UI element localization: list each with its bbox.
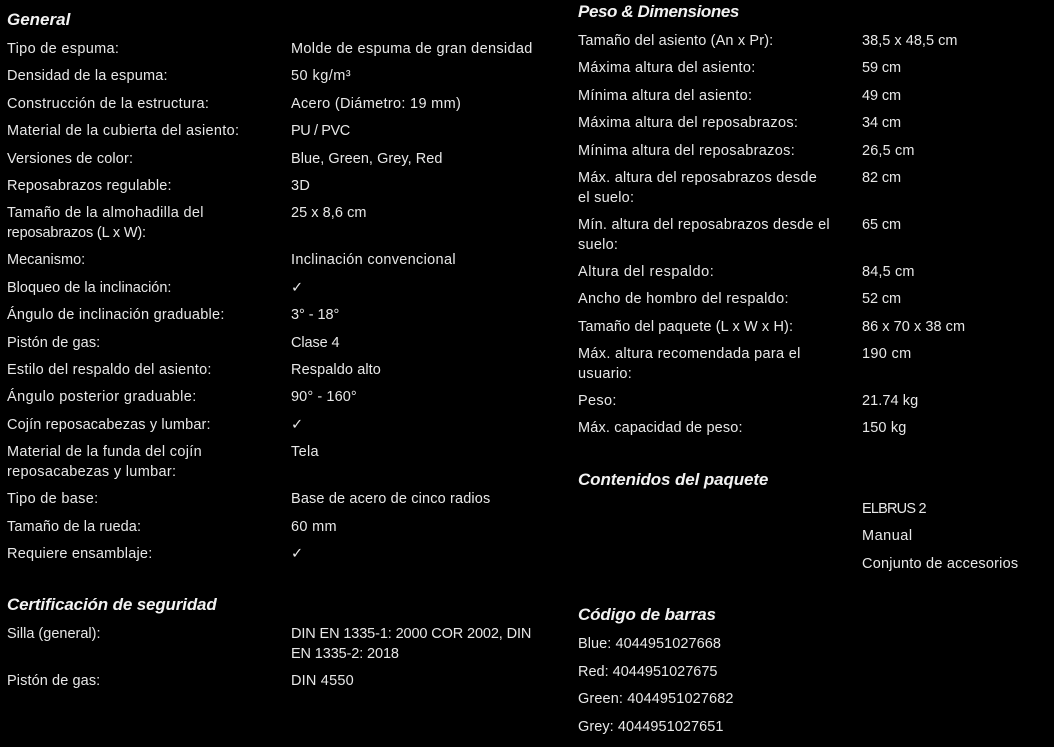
row: foam type: [7, 41, 533, 57]
row: chair certification: Silla (general):: [7, 626, 100, 642]
row: armrest pad size: [7, 205, 366, 241]
barcode: green: Green: 4044951027682: [578, 691, 734, 707]
barcode: red: Red: 4044951027675: [578, 664, 718, 680]
row: headrest and lumbar cushion: ✓: [291, 417, 303, 433]
row: seat cover material: [7, 123, 350, 139]
row: recommended user height: [578, 346, 911, 382]
row: wheel size: [7, 519, 337, 535]
row: tilt angle: 3° - 18°: [291, 307, 339, 323]
row: frame construction: [7, 96, 461, 112]
row: gas piston certification: DIN 4550: [291, 673, 354, 689]
row: gas piston: [7, 335, 340, 351]
row: backrest shoulder width: Ancho de hombro del respaldo:: [578, 291, 789, 307]
row: backrest angle: 90° - 160°: [291, 389, 357, 405]
row: adjustable armrest: Reposabrazos regulable:: [7, 178, 172, 194]
row: gas piston certification: [7, 673, 354, 689]
row: package size: 86 x 70 x 38 cm: [862, 319, 965, 335]
row: mechanism: Mecanismo:: [7, 252, 85, 268]
row: backrest style: [7, 362, 381, 378]
row: backrest style: Respaldo alto: [291, 362, 381, 378]
item: accessories: Conjunto de accesorios: [862, 556, 1018, 572]
row: chair certification: [7, 626, 531, 662]
row: backrest shoulder width: 52 cm: [862, 291, 901, 307]
row: base type: [7, 491, 490, 507]
row: backrest style: Estilo del respaldo del asiento:: [7, 362, 212, 378]
item: manual: Manual: [862, 528, 913, 544]
row: tilt lock: ✓: [291, 280, 303, 296]
row: weight: [578, 393, 918, 409]
row: max armrest height from floor: 82 cm: [862, 170, 901, 186]
row: max armrest height: Máxima altura del reposabrazos:: [578, 115, 798, 131]
row: weight: Peso:: [578, 393, 617, 409]
row: recommended user height: usuario:: [578, 366, 632, 382]
row: tilt angle: [7, 306, 339, 323]
row: seat cover material: PU / PVC: [291, 123, 350, 139]
row: colour versions: Blue, Green, Grey, Red: [291, 151, 443, 167]
heading: General: General: [7, 10, 70, 29]
row: armrest pad size: Tamaño de la almohadilla del: [7, 205, 204, 221]
row: foam type: Tipo de espuma:: [7, 41, 119, 57]
row: assembly required: Requiere ensamblaje:: [7, 546, 152, 562]
row: min seat height: 49 cm: [862, 88, 901, 104]
row: backrest height: Altura del respaldo:: [578, 264, 714, 280]
row: min armrest height from floor: [578, 217, 901, 253]
row: min seat height: Mínima altura del asiento:: [578, 88, 752, 104]
row: gas piston: Clase 4: [291, 335, 339, 351]
row: min armrest height from floor: suelo:: [578, 237, 618, 253]
row: seat size: [578, 33, 958, 49]
row: headrest and lumbar cushion: [7, 417, 303, 433]
row: chair certification: EN 1335-2: 2018: [291, 646, 399, 662]
row: frame construction: Construcción de la estructura:: [7, 96, 209, 112]
row: max armrest height from floor: Máx. altura del reposabrazos desde: [578, 170, 817, 186]
row: max seat height: [578, 60, 901, 76]
row: min armrest height from floor: 65 cm: [862, 217, 901, 233]
row: max armrest height: 34 cm: [862, 115, 901, 131]
row: min armrest height: [578, 143, 915, 159]
row: armrest pad size: reposabrazos (L x W):: [7, 225, 146, 241]
row: seat cover material: Material de la cubierta del asiento:: [7, 123, 239, 139]
row: tilt lock: [7, 280, 303, 296]
row: backrest height: 84,5 cm: [862, 264, 915, 280]
barcode: grey: Grey: 4044951027651: [578, 719, 723, 735]
row: min armrest height: Mínima altura del reposabrazos:: [578, 143, 795, 159]
row: min seat height: [578, 88, 901, 104]
row: frame construction: Acero (Diámetro: 19 mm): [291, 96, 461, 112]
heading: barcode: Código de barras: [578, 605, 716, 624]
row: gas piston certification: Pistón de gas:: [7, 673, 100, 689]
row: foam density: 50 kg/m³: [291, 68, 351, 84]
row: cushion cover material: reposacabezas y lumbar:: [7, 464, 176, 480]
row: mechanism: Inclinación convencional: [291, 252, 456, 268]
row: min armrest height from floor: Mín. altura del reposabrazos desde el: [578, 217, 830, 233]
row: max seat height: 59 cm: [862, 60, 901, 76]
row: backrest shoulder width: [578, 291, 901, 307]
row: gas piston: Pistón de gas:: [7, 335, 100, 351]
row: colour versions: [7, 151, 443, 167]
row: recommended user height: 190 cm: [862, 346, 911, 362]
item: ELBRUS 2: ELBRUS 2: [862, 501, 926, 517]
row: backrest angle: [7, 388, 357, 405]
row: base type: Base de acero de cinco radios: [291, 491, 490, 507]
row: tilt angle: Ángulo de inclinación graduable:: [7, 307, 225, 323]
row: backrest angle: Ángulo posterior graduable:: [7, 389, 197, 405]
row: base type: Tipo de base:: [7, 491, 98, 507]
row: seat size: 38,5 x 48,5 cm: [862, 33, 958, 49]
row: wheel size: Tamaño de la rueda:: [7, 519, 141, 535]
heading: package contents: Contenidos del paquete: [578, 470, 768, 489]
row: colour versions: Versiones de color:: [7, 151, 133, 167]
row: min armrest height: 26,5 cm: [862, 143, 915, 159]
row: mechanism: [7, 252, 456, 268]
row: adjustable armrest: [7, 178, 310, 194]
row: package size: [578, 319, 965, 335]
row: max armrest height: [578, 115, 901, 131]
row: package size: Tamaño del paquete (L x W x H):: [578, 319, 793, 335]
row: headrest and lumbar cushion: Cojín reposacabezas y lumbar:: [7, 417, 211, 433]
heading: weight and dimensions: Peso & Dimensiones: [578, 2, 739, 21]
row: backrest height: [578, 264, 915, 280]
barcode: blue: Blue: 4044951027668: [578, 636, 721, 652]
row: assembly required: [7, 546, 303, 562]
row: max weight capacity: 150 kg: [862, 420, 906, 436]
row: chair certification: DIN EN 1335-1: 2000 COR 2002, DIN: [291, 626, 531, 642]
row: max armrest height from floor: el suelo:: [578, 190, 634, 206]
row: max weight capacity: [578, 420, 906, 436]
row: max armrest height from floor: [578, 170, 901, 206]
row: cushion cover material: Tela: [291, 444, 319, 460]
row: cushion cover material: Material de la funda del cojín: [7, 444, 202, 460]
row: seat size: Tamaño del asiento (An x Pr):: [578, 33, 773, 49]
row: tilt lock: Bloqueo de la inclinación:: [7, 280, 171, 296]
row: adjustable armrest: 3D: [291, 178, 310, 194]
row: foam density: Densidad de la espuma:: [7, 68, 168, 84]
heading: safety certification: Certificación de seguridad: [7, 595, 217, 614]
row: foam type: Molde de espuma de gran densidad: [291, 41, 533, 57]
row: weight: 21.74 kg: [862, 393, 918, 409]
row: cushion cover material: [7, 444, 319, 480]
row: max weight capacity: Máx. capacidad de peso:: [578, 420, 743, 436]
row: recommended user height: Máx. altura recomendada para el: [578, 346, 801, 362]
row: foam density: [7, 68, 351, 84]
row: max seat height: Máxima altura del asiento:: [578, 60, 756, 76]
row: wheel size: 60 mm: [291, 519, 337, 535]
row: armrest pad size: 25 x 8,6 cm: [291, 205, 366, 221]
row: assembly required: ✓: [291, 546, 303, 562]
